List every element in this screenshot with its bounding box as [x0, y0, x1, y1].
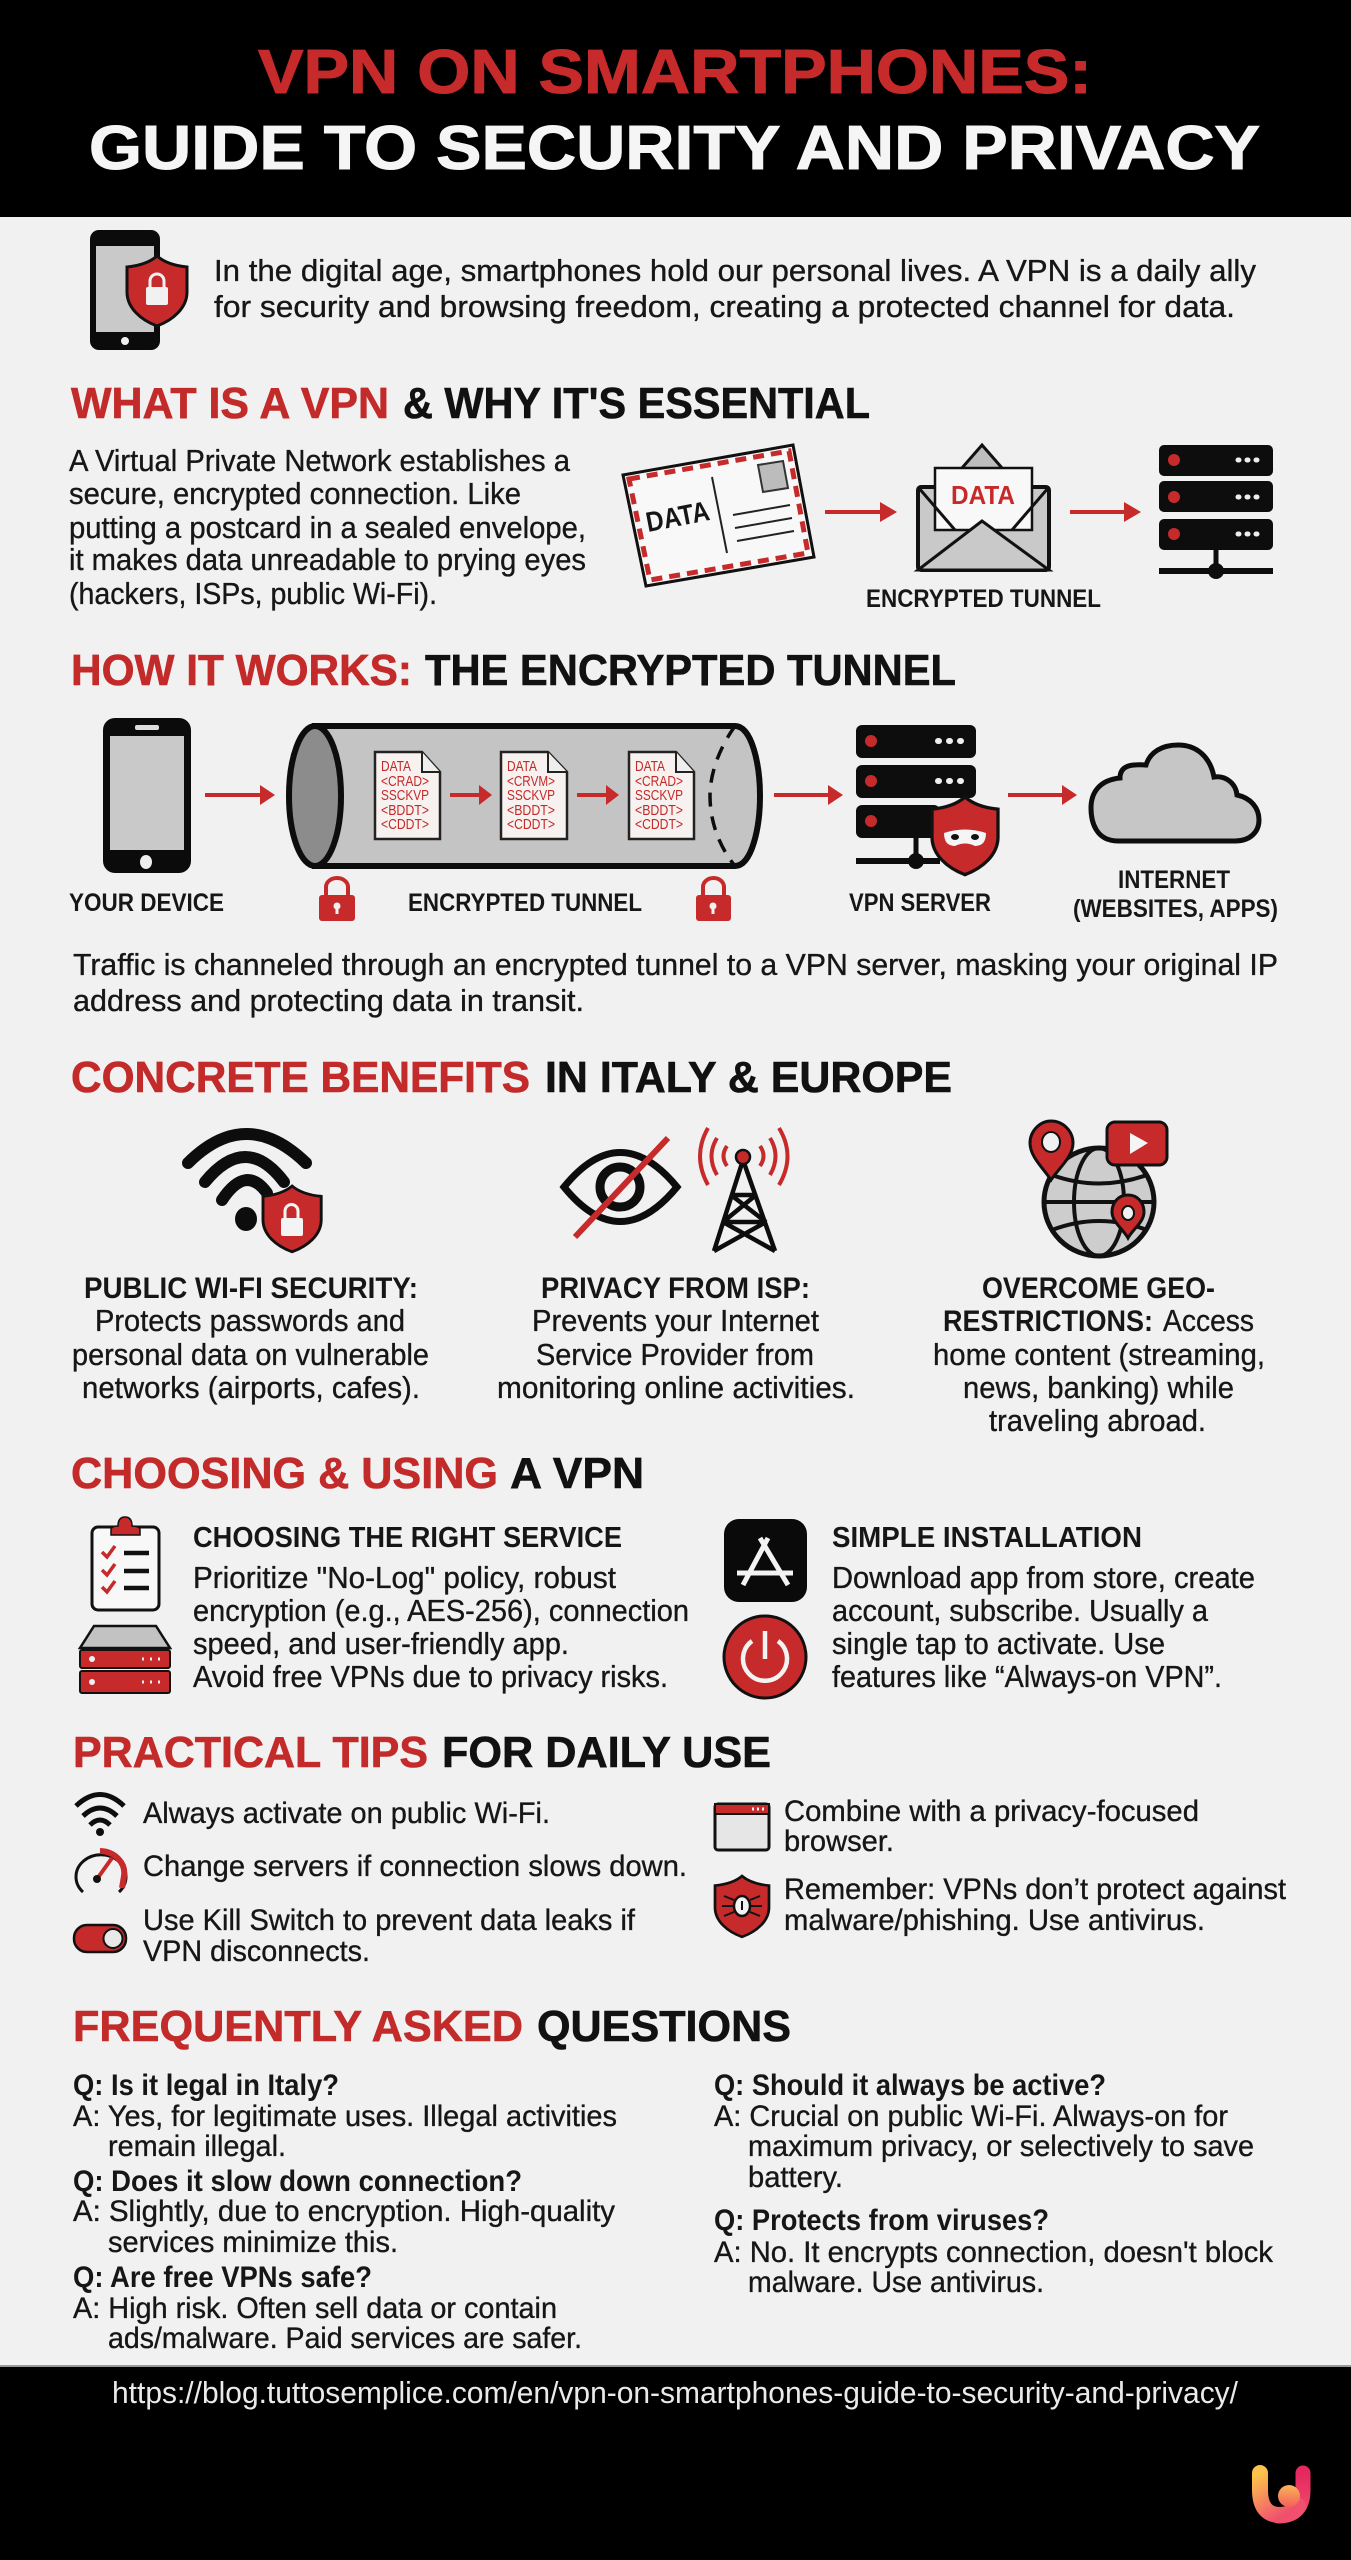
service text: Avoid free VPNs due to privacy risks.: [193, 1659, 668, 1694]
faq: legal: remain illegal.: [108, 2130, 286, 2163]
data document: [375, 752, 440, 839]
benefit: public wifi security: Protects passwords and: [95, 1303, 405, 1338]
icon: your device phone: [103, 718, 191, 873]
icon: lock: [319, 878, 355, 921]
benefit: geo restrictions: [933, 1272, 1265, 1438]
faq: slow down: [73, 2165, 615, 2259]
faq: free VPNs: Q: Are free VPNs safe?: [73, 2261, 372, 2294]
text block: Traffic is channeled through an encrypted tunnel to a VPN server, masking your original IP: [73, 947, 1278, 982]
benefit: geo restrictions: RESTRICTIONS:: [943, 1305, 1153, 1338]
title line 1: VPN ON SMARTPHONES:: [258, 38, 1092, 107]
text block: putting a postcard in a sealed envelope,: [69, 510, 586, 545]
data document: DATA: [507, 759, 537, 775]
data document: <CRVM>: [507, 774, 555, 790]
data document: DATA: [635, 759, 665, 775]
tip: Always activate on public Wi-Fi.: [143, 1797, 550, 1830]
icon: postcard: [623, 445, 814, 586]
icon: checklist: [92, 1517, 159, 1610]
data document: <BDDT>: [381, 803, 429, 819]
faq: slow down: Q: Does it slow down connection?: [73, 2165, 522, 2198]
icon: malware shield: [715, 1876, 769, 1937]
icon: browser: [715, 1804, 769, 1850]
panel: concrete benefits: [71, 1053, 1265, 1438]
icon: phone with shield: [90, 230, 187, 350]
tip: [784, 1873, 1287, 1937]
intro panel: [90, 230, 1256, 350]
heading: CONCRETE BENEFITS: [71, 1053, 530, 1102]
data document: <CDDT>: [507, 817, 555, 833]
faq: always active: Q: Should it always be active?: [714, 2069, 1106, 2102]
heading: PRACTICAL TIPS: [73, 1728, 428, 1777]
icon: app store: [724, 1519, 807, 1602]
faq: always active: battery.: [748, 2161, 843, 2194]
benefit: geo restrictions: OVERCOME GEO-: [982, 1272, 1215, 1305]
tunnel diagram: [289, 726, 760, 866]
diagram labels: (WEBSITES, APPS): [1073, 895, 1278, 923]
icon: postcard: DATA: [643, 495, 712, 538]
benefit: geo restrictions: Access: [1163, 1303, 1254, 1338]
intro text: In the digital age, smartphones hold our personal lives. A VPN is a daily ally: [214, 253, 1256, 288]
text block: address and protecting data in transit.: [73, 983, 584, 1018]
installation text: account, subscribe. Usually a: [832, 1593, 1209, 1628]
benefit: privacy from ISP: monitoring online activities.: [497, 1370, 855, 1405]
tip: Combine with a privacy-focused: [784, 1795, 1199, 1828]
faq: free VPNs: [73, 2261, 582, 2355]
faq: legal: [73, 2069, 617, 2163]
text block: secure, encrypted connection. Like: [69, 476, 521, 511]
service text: speed, and user-friendly app.: [193, 1626, 569, 1661]
data document: <CRAD>: [381, 774, 429, 790]
heading: [71, 1053, 952, 1102]
tip: Change servers if connection slows down.: [143, 1850, 687, 1883]
benefit: geo restrictions: news, banking) while: [963, 1370, 1234, 1405]
faq: viruses: [714, 2204, 1274, 2299]
arrow: [577, 785, 619, 805]
icon: globe with pins and video: [1030, 1121, 1167, 1256]
service text: [193, 1522, 689, 1694]
installation text: [832, 1522, 1255, 1694]
diagram labels: ENCRYPTED TUNNEL: [408, 889, 642, 917]
text block: [69, 443, 586, 611]
heading: FOR DAILY USE: [442, 1728, 771, 1777]
benefit: public wifi security: PUBLIC WI-FI SECURITY:: [84, 1272, 418, 1305]
icon: VPN server with shield: [856, 725, 998, 875]
icon: envelope: [918, 445, 1049, 570]
text block: [73, 947, 1278, 1018]
benefit: geo restrictions: home content (streaming,: [933, 1337, 1265, 1372]
heading: [73, 2002, 791, 2051]
intro text: for security and browsing freedom, creating a protected channel for data.: [214, 289, 1235, 324]
diagram labels: VPN SERVER: [849, 889, 991, 917]
data document: <BDDT>: [507, 803, 555, 819]
benefit: public wifi security: [72, 1272, 429, 1405]
diagram labels: YOUR DEVICE: [69, 889, 224, 917]
heading: A VPN: [510, 1449, 644, 1498]
installation text: features like “Always-on VPN”.: [832, 1659, 1222, 1694]
faq: viruses: malware. Use antivirus.: [748, 2266, 1044, 2299]
data document: <BDDT>: [635, 803, 683, 819]
heading: [71, 379, 870, 428]
data document: <CDDT>: [381, 817, 429, 833]
faq: legal: Q: Is it legal in Italy?: [73, 2069, 339, 2102]
heading: WHAT IS A VPN: [71, 379, 389, 428]
icon: gauge: [76, 1851, 126, 1892]
panel: how it works: [69, 646, 1278, 1018]
arrow: [1008, 785, 1077, 805]
arrow: [1070, 502, 1141, 522]
tip: VPN disconnects.: [143, 1935, 370, 1968]
diagram labels: [69, 866, 1278, 923]
tip: [143, 1904, 636, 1968]
heading: & WHY IT'S ESSENTIAL: [403, 379, 870, 428]
icon: envelope: DATA: [951, 480, 1015, 510]
benefit: privacy from ISP: [497, 1272, 855, 1405]
data document: <CRAD>: [635, 774, 683, 790]
data document: SSCKVP: [635, 788, 683, 804]
header band: [0, 0, 1351, 217]
data document: [629, 752, 694, 839]
installation text: Download app from store, create: [832, 1560, 1255, 1595]
tip: browser.: [784, 1825, 894, 1858]
service text: encryption (e.g., AES-256), connection: [193, 1593, 689, 1628]
arrow: [450, 785, 492, 805]
heading: THE ENCRYPTED TUNNEL: [425, 646, 956, 695]
icon: power button: [724, 1616, 806, 1698]
data document: DATA: [381, 759, 411, 775]
faq: slow down: services minimize this.: [108, 2226, 398, 2259]
text block: A Virtual Private Network establishes a: [69, 443, 571, 478]
benefit: public wifi security: personal data on vulnerable: [72, 1337, 429, 1372]
diagram labels: INTERNET: [1118, 866, 1230, 894]
tip: Remember: VPNs don’t protect against: [784, 1873, 1287, 1906]
heading: FREQUENTLY ASKED: [73, 2002, 523, 2051]
intro text: [214, 253, 1256, 324]
installation text: single tap to activate. Use: [832, 1626, 1165, 1661]
icon: toggle: [74, 1925, 126, 1952]
panel: FAQ: [73, 2002, 1274, 2355]
heading: QUESTIONS: [537, 2002, 791, 2051]
service text: CHOOSING THE RIGHT SERVICE: [193, 1522, 622, 1554]
benefit: privacy from ISP: PRIVACY FROM ISP:: [541, 1272, 810, 1305]
title line 2: GUIDE TO SECURITY AND PRIVACY: [89, 114, 1260, 183]
faq: free VPNs: ads/malware. Paid services are safer.: [108, 2322, 582, 2355]
icon: red server: [80, 1626, 170, 1693]
data document: SSCKVP: [381, 788, 429, 804]
data document: SSCKVP: [507, 788, 555, 804]
heading: IN ITALY & EUROPE: [545, 1053, 952, 1102]
benefit: privacy from ISP: Prevents your Internet: [532, 1303, 819, 1338]
faq: always active: A: Crucial on public Wi-Fi. Always-on for: [714, 2100, 1228, 2133]
faq: viruses: Q: Protects from viruses?: [714, 2204, 1049, 2237]
installation text: SIMPLE INSTALLATION: [832, 1522, 1142, 1554]
icon: lock: [696, 878, 731, 921]
icon: crossed eye and antenna: [564, 1128, 788, 1251]
icon: wifi: [76, 1794, 124, 1836]
tip: malware/phishing. Use antivirus.: [784, 1904, 1205, 1937]
faq: legal: A: Yes, for legitimate uses. Illegal activities: [73, 2100, 617, 2133]
heading: [73, 1728, 771, 1777]
heading: CHOOSING & USING: [71, 1449, 498, 1498]
tip: [784, 1795, 1199, 1858]
faq: slow down: A: Slightly, due to encryption. High-quality: [73, 2195, 615, 2228]
benefit: public wifi security: networks (airports, cafes).: [82, 1370, 420, 1405]
arrow: [205, 785, 275, 805]
label: ENCRYPTED TUNNEL: [866, 585, 1101, 613]
tip: Use Kill Switch to prevent data leaks if: [143, 1904, 636, 1937]
data document: [501, 752, 567, 839]
icon: server: [1159, 445, 1273, 579]
faq: always active: maximum privacy, or selectively to save: [748, 2130, 1254, 2163]
footer band: [0, 2365, 1351, 2560]
icon: cloud: [1091, 745, 1259, 841]
icon: wifi with shield: [188, 1134, 321, 1252]
benefit: privacy from ISP: Service Provider from: [536, 1337, 814, 1372]
benefit: geo restrictions: traveling abroad.: [989, 1403, 1206, 1438]
arrow: [825, 502, 897, 522]
service text: Prioritize "No-Log" policy, robust: [193, 1560, 616, 1595]
panel: choosing and using: [71, 1449, 1255, 1698]
text block: (hackers, ISPs, public Wi-Fi).: [69, 576, 437, 611]
data document: <CDDT>: [635, 817, 683, 833]
icon: logo: [1260, 2473, 1303, 2516]
faq: free VPNs: A: High risk. Often sell data or contain: [73, 2292, 557, 2325]
source url: https://blog.tuttosemplice.com/en/vpn-on-smartphones-guide-to-security-and-privacy/: [112, 2375, 1238, 2410]
arrow: [774, 785, 843, 805]
panel: what is a VPN: [69, 379, 1273, 613]
heading: [71, 646, 956, 695]
text block: it makes data unreadable to prying eyes: [69, 542, 586, 577]
panel: practical tips: [73, 1728, 1287, 1968]
faq: always active: [714, 2069, 1254, 2194]
faq: viruses: A: No. It encrypts connection, doesn't block: [714, 2236, 1274, 2269]
heading: HOW IT WORKS:: [71, 646, 412, 695]
